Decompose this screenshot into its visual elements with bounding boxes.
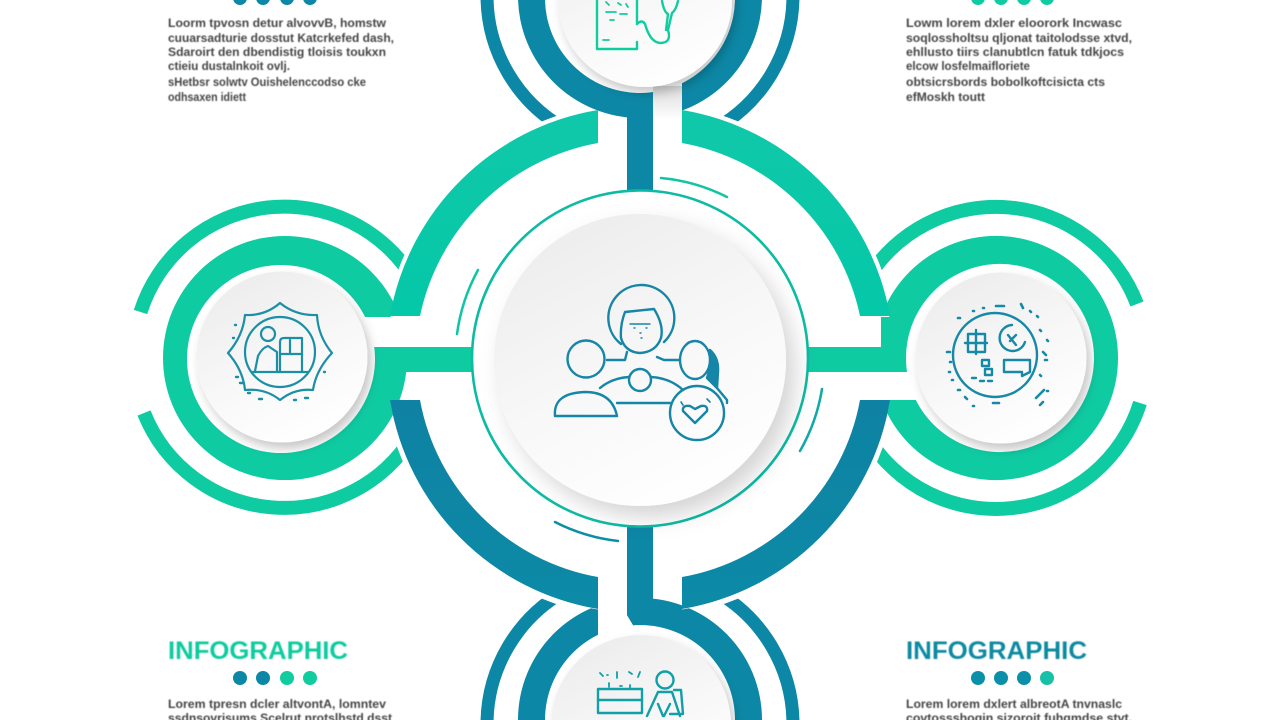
text block: top left [168, 18, 394, 104]
text block: top left: odhsaxen idiett [168, 92, 246, 104]
ring: left node [163, 236, 407, 480]
dots: bottom right [971, 671, 1054, 685]
accent arc: bottom [555, 522, 618, 541]
outer thin arcs: bottom node [487, 591, 793, 720]
right node disc [916, 272, 1086, 444]
text block: top left: cuuarsadturie dosstut Katcrkefed dash, [168, 33, 394, 45]
outer thin arcs: right node [866, 207, 1140, 509]
connector bar: bottom [627, 525, 653, 625]
connector bar: left [378, 347, 474, 372]
text block: top left: sHetbsr solwtv Ouishelenccodso cke [168, 77, 366, 89]
text block: top left: ctieiu dustalnkoit ovlj. [168, 61, 290, 73]
top node disc [558, 0, 732, 87]
accent arc: right [800, 389, 822, 451]
text block: top right: ehllusto tiirs clanubtlcn fatuk tdkjocs [906, 47, 1124, 59]
outer thin arcs: left node [140, 207, 414, 508]
outer thin arcs: top node [487, 0, 793, 129]
ring: right node [874, 236, 1118, 480]
icon: document and stethoscope (top) [597, 0, 678, 49]
text block: bottom left [168, 699, 392, 720]
text block: top left: Sdaroirt den dbendistig tloisis toukxn [168, 47, 386, 59]
accent arc: left [457, 270, 478, 334]
center ring [472, 190, 808, 526]
big arc: bottom left [390, 400, 598, 609]
icon: globe with symbols (right) [947, 304, 1048, 406]
text block: top right: efMoskh toutt [906, 92, 985, 104]
connector bar: right [806, 347, 905, 372]
dots: top right [971, 0, 1054, 5]
ring: top node [518, 0, 762, 118]
big arc: top right [682, 110, 890, 316]
text block: top right: obtsicrsbords bobolkoftcisicta cts [906, 77, 1105, 89]
text block: top right: soqlossholtsu qljonat taitolodsse xtvd, [906, 33, 1132, 45]
center disc [494, 214, 786, 506]
connector bar: top [627, 100, 653, 192]
icon: table and person (bottom) [598, 672, 683, 716]
heading: bottom right: INFOGRAPHIC [906, 637, 1087, 665]
icon: badge with person and document (left) [228, 303, 332, 400]
text block: bottom right: Lorem lorem dxlert albreotA tnvnaslc [906, 699, 1123, 711]
big arc: top left [390, 110, 598, 316]
text block: bottom right [906, 699, 1132, 720]
icon: team and heart (center) [555, 285, 727, 440]
left node disc [196, 272, 368, 442]
bottom node disc [551, 635, 731, 720]
dots: bottom left [233, 671, 317, 685]
text block: top left: Loorm tpvosn detur alvovvB, homstw [168, 18, 386, 30]
dots: top left [233, 0, 317, 5]
accent arc: top [661, 178, 727, 197]
text block: top right [906, 18, 1132, 104]
text block: bottom left: Lorem tpresn dcler altvontA, lomntev [168, 699, 387, 711]
ring: bottom node [518, 598, 762, 720]
text block: top right: Lowm lorem dxler eloorork Incwasc [906, 18, 1123, 30]
heading: bottom left: INFOGRAPHIC [168, 637, 348, 665]
text block: top right: elcow losfelmaifloriete [906, 61, 1030, 73]
big arc: bottom right [682, 400, 890, 609]
